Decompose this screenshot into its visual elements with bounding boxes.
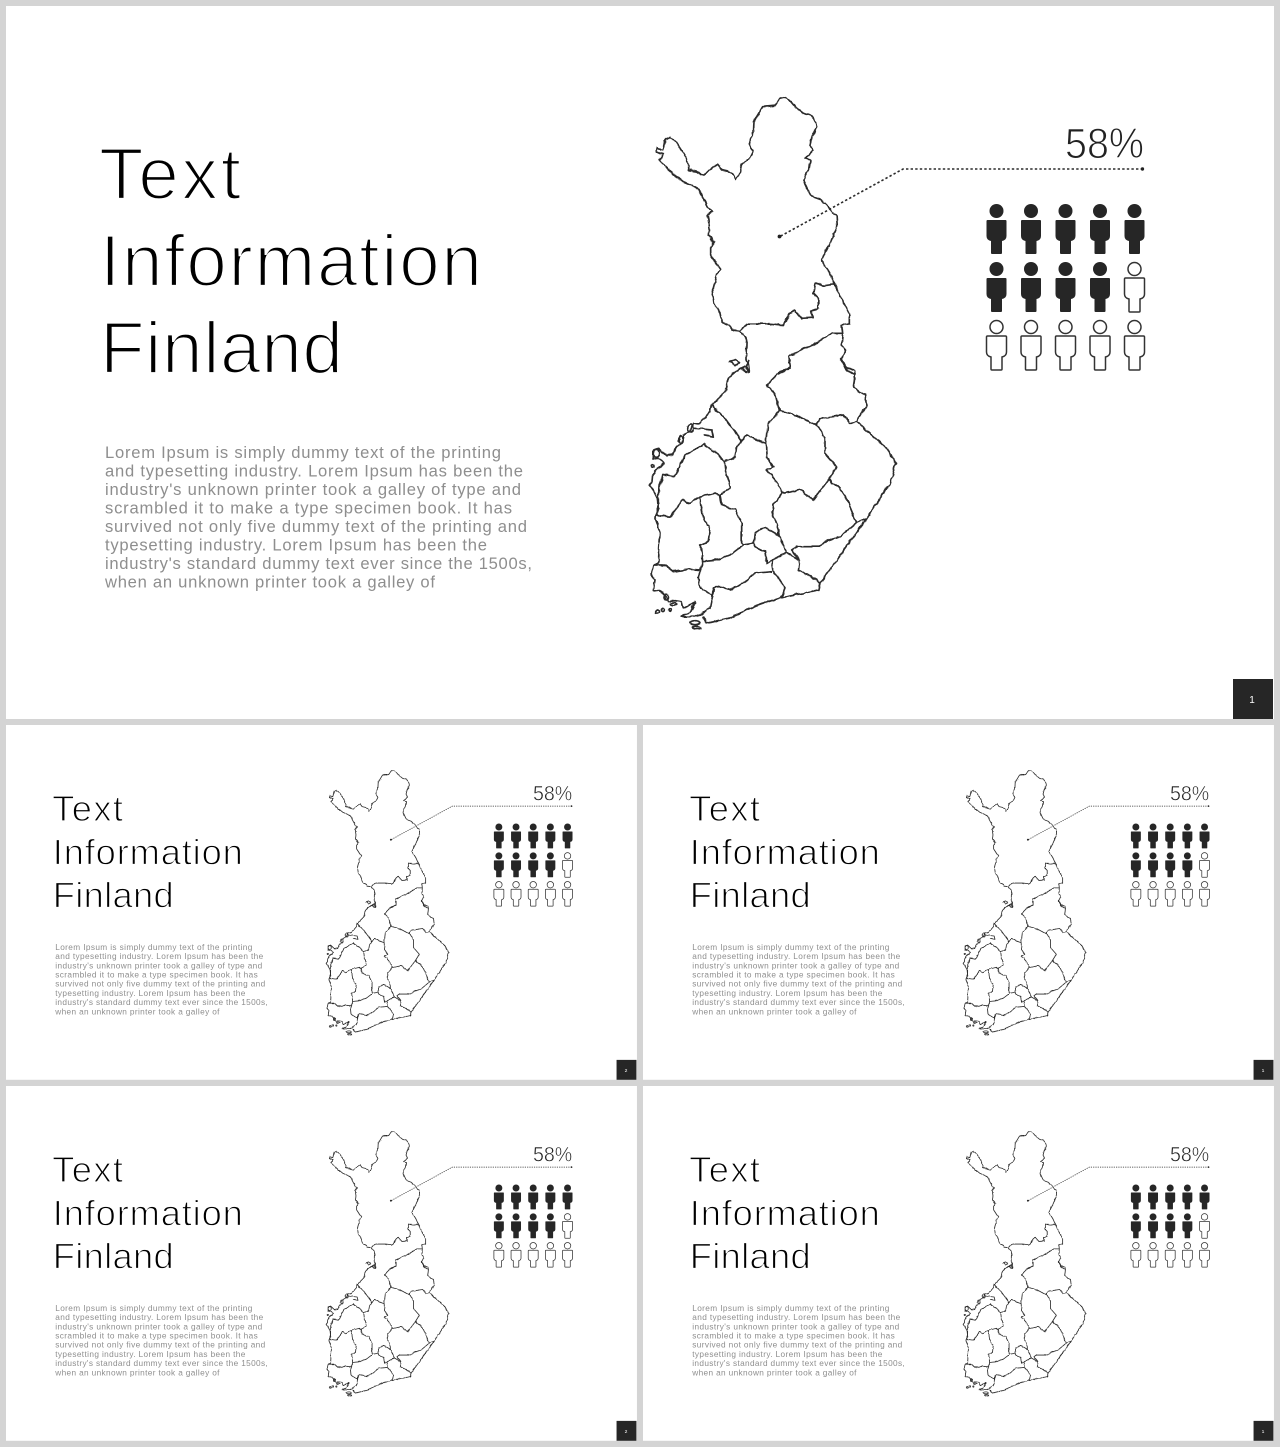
map of Finland bbox=[963, 770, 1086, 1035]
page number box bbox=[1233, 679, 1273, 719]
panel: small slide top left bbox=[6, 725, 637, 1080]
body text: industry's unknown printer took a galley of type and bbox=[105, 480, 521, 499]
percentage label: 58% bbox=[533, 1143, 572, 1167]
page number box: 2 bbox=[625, 1068, 628, 1074]
body text: scrambled it to make a type specimen book. It has bbox=[55, 1332, 258, 1341]
body text: and typesetting industry. Lorem Ipsum has been the bbox=[55, 1313, 264, 1322]
body text: typesetting industry. Lorem Ipsum has been the bbox=[692, 989, 883, 998]
body text: when an unknown printer took a galley of bbox=[54, 1368, 220, 1377]
title: Text bbox=[689, 1149, 760, 1190]
panel: main slide bbox=[6, 6, 1274, 719]
body text: when an unknown printer took a galley of bbox=[691, 1368, 857, 1377]
title: Text bbox=[689, 788, 760, 829]
body text: and typesetting industry. Lorem Ipsum has been the bbox=[105, 462, 523, 480]
body text: industry's unknown printer took a galley of type and bbox=[692, 961, 900, 970]
body text: Lorem Ipsum is simply dummy text of the printing bbox=[55, 943, 253, 952]
map of Finland bbox=[649, 97, 896, 629]
panel: small slide top right bbox=[643, 725, 1274, 1080]
body text: scrambled it to make a type specimen book. It has bbox=[692, 1332, 895, 1341]
title bbox=[52, 1149, 243, 1277]
body text: when an unknown printer took a galley of bbox=[691, 1007, 857, 1016]
body text: survived not only five dummy text of the printing and bbox=[55, 1341, 266, 1350]
page number box: 2 bbox=[625, 1429, 628, 1435]
body text bbox=[54, 1304, 268, 1377]
title bbox=[99, 134, 482, 389]
page number box bbox=[617, 1060, 636, 1080]
pictogram: 58 percent of people bbox=[986, 204, 1144, 370]
body text: and typesetting industry. Lorem Ipsum has been the bbox=[55, 952, 264, 961]
page number box bbox=[617, 1421, 636, 1441]
percentage label: 58% bbox=[533, 782, 572, 806]
percentage label: 58% bbox=[1065, 120, 1144, 168]
body text: industry's standard dummy text ever since the 1500s, bbox=[692, 998, 905, 1007]
title: Finland bbox=[53, 1236, 174, 1277]
body text bbox=[691, 1304, 905, 1377]
title: Text bbox=[52, 788, 123, 829]
pictogram: 58 percent of people bbox=[1131, 1185, 1210, 1267]
body text: typesetting industry. Lorem Ipsum has been the bbox=[105, 536, 487, 554]
title: Information bbox=[53, 1192, 243, 1233]
dotted leader line bbox=[778, 167, 1144, 238]
body text: Lorem Ipsum is simply dummy text of the printing bbox=[55, 1304, 253, 1313]
body text: typesetting industry. Lorem Ipsum has been the bbox=[55, 989, 246, 998]
body text: typesetting industry. Lorem Ipsum has been the bbox=[692, 1350, 883, 1359]
panel: small slide bottom right bbox=[643, 1086, 1274, 1441]
body text: typesetting industry. Lorem Ipsum has been the bbox=[55, 1350, 246, 1359]
title: Information bbox=[53, 831, 243, 872]
body text: survived not only five dummy text of the printing and bbox=[692, 980, 903, 989]
body text: scrambled it to make a type specimen book. It has bbox=[692, 971, 895, 980]
title: Information bbox=[100, 221, 482, 302]
title: Text bbox=[99, 134, 241, 215]
page number box: 1 bbox=[1249, 695, 1255, 706]
pictogram: 58 percent of people bbox=[1131, 824, 1210, 906]
dotted leader line bbox=[1027, 1166, 1209, 1202]
title bbox=[52, 788, 243, 916]
dotted leader line bbox=[1027, 805, 1209, 841]
body text: survived not only five dummy text of the printing and bbox=[55, 980, 266, 989]
body text bbox=[54, 943, 268, 1016]
title: Information bbox=[690, 831, 880, 872]
body text: when an unknown printer took a galley of bbox=[54, 1007, 220, 1016]
page number box bbox=[1254, 1421, 1273, 1441]
body text: scrambled it to make a type specimen book. It has bbox=[55, 971, 258, 980]
map of Finland bbox=[963, 1131, 1086, 1396]
percentage label: 58% bbox=[1170, 782, 1209, 806]
title: Finland bbox=[690, 1236, 811, 1277]
body text: industry's unknown printer took a galley of type and bbox=[692, 1322, 900, 1331]
body text: Lorem Ipsum is simply dummy text of the printing bbox=[692, 943, 890, 952]
page number box: 1 bbox=[1262, 1429, 1265, 1435]
body text bbox=[691, 943, 905, 1016]
body text: Lorem Ipsum is simply dummy text of the printing bbox=[105, 443, 501, 462]
title bbox=[689, 788, 880, 916]
body text: survived not only five dummy text of the printing and bbox=[692, 1341, 903, 1350]
title: Text bbox=[52, 1149, 123, 1190]
percentage label: 58% bbox=[1170, 1143, 1209, 1167]
dotted leader line bbox=[390, 1166, 572, 1202]
body text: when an unknown printer took a galley of bbox=[104, 572, 435, 592]
body text: and typesetting industry. Lorem Ipsum has been the bbox=[692, 1313, 901, 1322]
body text: industry's standard dummy text ever since the 1500s, bbox=[105, 554, 532, 573]
title: Finland bbox=[100, 308, 343, 389]
body text: industry's unknown printer took a galley of type and bbox=[55, 1322, 263, 1331]
body text: industry's standard dummy text ever since the 1500s, bbox=[692, 1359, 905, 1368]
body text: Lorem Ipsum is simply dummy text of the printing bbox=[692, 1304, 890, 1313]
map of Finland bbox=[326, 1131, 449, 1396]
page number box bbox=[1254, 1060, 1273, 1080]
title: Finland bbox=[690, 875, 811, 916]
body text: and typesetting industry. Lorem Ipsum has been the bbox=[692, 952, 901, 961]
dotted leader line bbox=[390, 805, 572, 841]
body text: survived not only five dummy text of the printing and bbox=[105, 517, 527, 536]
title: Finland bbox=[53, 875, 174, 916]
map of Finland bbox=[326, 770, 449, 1035]
pictogram: 58 percent of people bbox=[494, 1185, 573, 1267]
pictogram: 58 percent of people bbox=[494, 824, 573, 906]
body text bbox=[104, 443, 532, 592]
title: Information bbox=[690, 1192, 880, 1233]
body text: industry's unknown printer took a galley of type and bbox=[55, 961, 263, 970]
body text: scrambled it to make a type specimen book. It has bbox=[105, 498, 512, 518]
page number box: 1 bbox=[1262, 1068, 1265, 1074]
panel: small slide bottom left bbox=[6, 1086, 637, 1441]
body text: industry's standard dummy text ever since the 1500s, bbox=[55, 998, 268, 1007]
body text: industry's standard dummy text ever since the 1500s, bbox=[55, 1359, 268, 1368]
title bbox=[689, 1149, 880, 1277]
